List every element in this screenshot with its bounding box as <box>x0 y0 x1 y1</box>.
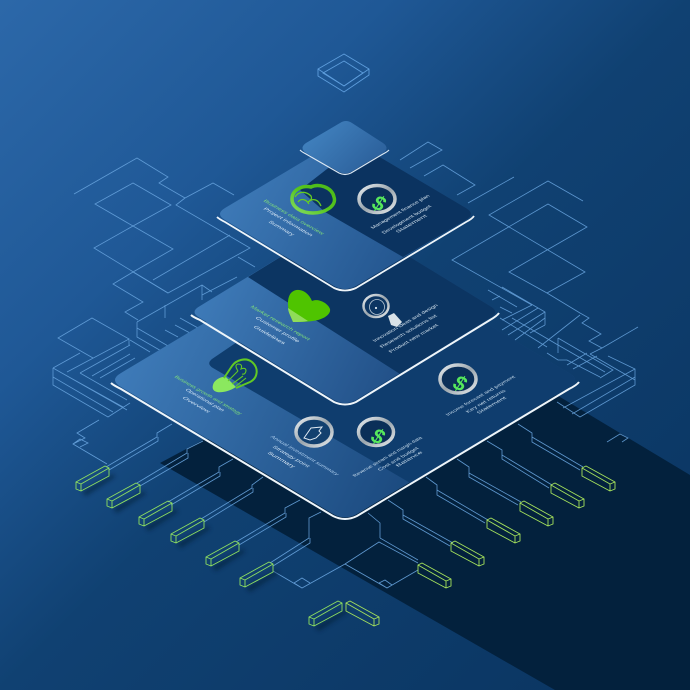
text: middle layer right block <box>372 303 441 354</box>
dark region of bottom layer <box>209 242 575 484</box>
panel: middle layer <box>191 221 499 404</box>
panel: bottom layer <box>111 242 579 519</box>
text: bottom layer lower block <box>265 435 341 477</box>
middle layer edge <box>191 313 499 404</box>
dark region of top layer <box>300 143 471 257</box>
cast shadow <box>160 385 690 690</box>
icon: silver light bulb <box>364 295 402 327</box>
text: top layer right block: Management finance plan <box>370 194 432 230</box>
text: bottom layer centre block: Cost and budget <box>377 446 421 472</box>
text: bottom layer left block: Overview <box>180 396 212 414</box>
text: top layer right block: Development budget <box>381 204 434 235</box>
connectors: left row <box>76 466 342 626</box>
text: bottom layer lower block: Annual investment summary <box>268 435 341 477</box>
icon: dollar ring centre <box>358 418 394 449</box>
icon: small floating box <box>318 54 369 92</box>
text: bottom layer right block: Statement <box>476 396 509 415</box>
text: top layer right block <box>370 194 434 235</box>
text: bottom layer left block: Operational plan <box>183 388 226 413</box>
bottom layer edge <box>111 382 579 519</box>
icon: dollar ring right <box>440 365 476 396</box>
text: top layer left block: Summary <box>266 220 296 237</box>
icon: dollar ring: $ <box>367 192 391 216</box>
text: middle layer left block: Market research report <box>248 305 312 342</box>
circuit traces to left connectors <box>73 420 418 588</box>
icon: green heart <box>288 290 330 322</box>
panel: top layer <box>217 140 474 290</box>
icon: dollar ring <box>359 186 395 216</box>
top layer edge <box>217 216 474 290</box>
icon: green ring with heart outline <box>292 185 334 213</box>
text: middle layer right block: Product new market <box>388 323 441 354</box>
icon: dollar ring centre: $ <box>366 425 390 449</box>
circuit lines: upper right <box>400 142 638 442</box>
circuit lines: upper left <box>53 158 255 417</box>
text: middle layer right block: Research solutions list <box>379 314 440 349</box>
connector shadows <box>82 474 348 631</box>
connectors: right row <box>346 466 615 626</box>
text: bottom layer centre block: Balance <box>395 450 425 468</box>
text: middle layer right block: Innovation ideas and design <box>372 303 440 343</box>
text: top layer left block: Business data overview <box>261 199 326 236</box>
text: bottom layer right block: Key net returns <box>465 389 508 414</box>
text: top layer right block: Statement <box>395 214 430 234</box>
text: bottom layer centre block: Revenue stream and margin data <box>352 436 424 478</box>
text: bottom layer left block: Business growth and strategy <box>172 375 244 416</box>
circuit traces to right connectors <box>345 424 583 588</box>
text: top layer left block: Project information <box>261 207 314 238</box>
text: bottom layer lower block: Summary <box>265 451 297 469</box>
text: middle layer left block <box>248 305 312 346</box>
dark region of middle layer <box>248 221 496 374</box>
text: middle layer left block: Guidelines <box>251 325 287 346</box>
text: middle layer left block: Customer profile <box>253 316 301 344</box>
icon: green light bulb <box>213 359 257 392</box>
text: bottom layer lower block: Strategy point <box>270 445 312 469</box>
icon: dollar ring right: $ <box>448 372 472 396</box>
text: top layer left block <box>261 199 326 238</box>
icon: pen in silver ring <box>296 418 332 446</box>
panel: small top tile <box>300 121 389 174</box>
text: bottom layer right block: Income forecast and payment <box>445 375 518 417</box>
